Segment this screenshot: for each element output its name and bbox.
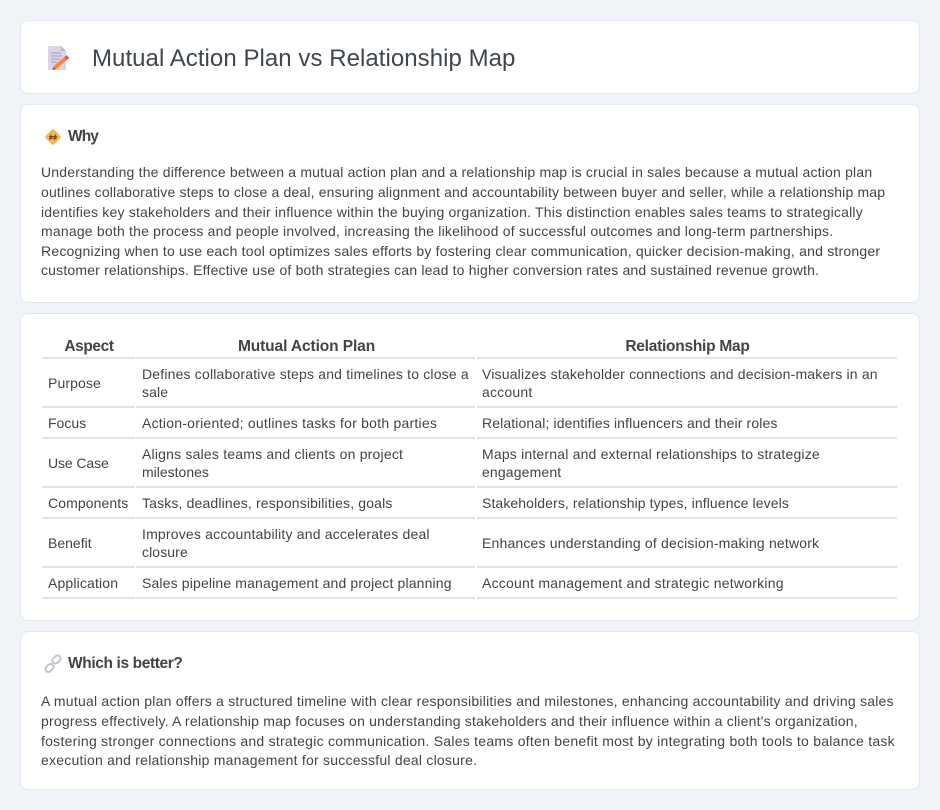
row: purpose: sale bbox=[142, 384, 168, 400]
row: components: Components bbox=[48, 495, 128, 511]
text block: which is better: progress effectively. A relationship map focuses on understanding stakeholders and their influence within a client's organization, bbox=[41, 713, 858, 729]
row: benefit: Benefit bbox=[48, 535, 92, 551]
row: use case bbox=[42, 446, 897, 488]
row: use case: Use Case bbox=[48, 455, 109, 471]
text block: why: Understanding the difference between a mutual action plan and a relationship map is crucial in sales because a mutual action plan bbox=[41, 164, 872, 180]
row: application: Account management and strategic networking bbox=[482, 575, 784, 591]
text block: why: identifies key stakeholders and their influence within the buying organization. This distinction enables sales teams to strategically bbox=[41, 204, 863, 220]
row: benefit bbox=[42, 526, 897, 568]
text block: which is better bbox=[41, 693, 895, 768]
text block: why bbox=[41, 164, 885, 278]
heading: which is better: Which is better? bbox=[68, 655, 182, 672]
table header row: Aspect bbox=[64, 338, 114, 355]
row: purpose: Visualizes stakeholder connections and decision-makers in an bbox=[482, 366, 878, 382]
panel: why bbox=[20, 104, 920, 303]
row: components: Tasks, deadlines, responsibilities, goals bbox=[142, 495, 393, 511]
header panel bbox=[20, 20, 920, 94]
row: benefit: Improves accountability and accelerates deal bbox=[142, 526, 430, 542]
table header row: Relationship Map bbox=[625, 338, 750, 355]
text block: which is better: execution and relationship management for successful deal closure. bbox=[41, 752, 477, 768]
text block: which is better: fostering stronger connections and strategic communication. Sales teams often benefit most by integrating both tools to balance task bbox=[41, 733, 895, 749]
row: focus: Action-oriented; outlines tasks for both parties bbox=[142, 415, 437, 431]
row: purpose: account bbox=[482, 384, 532, 400]
text block: which is better: A mutual action plan offers a structured timeline with clear responsibilities and milestones, enhancing accountability and driving sales bbox=[41, 693, 894, 709]
row: use case: milestones bbox=[142, 464, 209, 480]
row: focus bbox=[42, 415, 897, 439]
icon: chain link bbox=[44, 654, 62, 673]
table header row: Mutual Action Plan bbox=[238, 338, 375, 355]
text block: why: Recognizing when to use each tool optimizes sales efforts by fostering clear communication, quicker decision-making, and stronger bbox=[41, 243, 880, 259]
panel: comparison table bbox=[20, 313, 920, 621]
text block: why: manage both the process and people involved, increasing the likelihood of successful outcomes and long-term partnerships. bbox=[41, 223, 833, 239]
row: purpose: Purpose bbox=[48, 375, 101, 391]
icon: document with pencil bbox=[48, 46, 70, 70]
text block: why: customer relationships. Effective use of both strategies can lead to higher conversion rates and sustained revenue growth. bbox=[41, 262, 819, 278]
row: focus: Relational; identifies influencers and their roles bbox=[482, 415, 778, 431]
row: benefit: closure bbox=[142, 544, 188, 560]
row: use case: engagement bbox=[482, 464, 561, 480]
row: components: Stakeholders, relationship types, influence levels bbox=[482, 495, 789, 511]
row: purpose bbox=[42, 366, 897, 408]
row: focus: Focus bbox=[48, 415, 86, 431]
row: purpose: Defines collaborative steps and timelines to close a bbox=[142, 366, 469, 382]
icon: construction diamond bbox=[45, 129, 61, 145]
row: use case: Aligns sales teams and clients on project bbox=[142, 446, 403, 462]
title: Mutual Action Plan vs Relationship Map bbox=[92, 45, 515, 72]
row: application: Sales pipeline management and project planning bbox=[142, 575, 452, 591]
row: application: Application bbox=[48, 575, 118, 591]
row: use case: Maps internal and external relationships to strategize bbox=[482, 446, 820, 462]
heading: why: Why bbox=[68, 128, 98, 145]
panel: which is better bbox=[20, 631, 920, 790]
row: components bbox=[42, 495, 897, 519]
row: benefit: Enhances understanding of decision-making network bbox=[482, 535, 819, 551]
row: application bbox=[42, 575, 897, 599]
table header row bbox=[42, 338, 897, 359]
text block: why: outlines collaborative steps to close a deal, ensuring alignment and accountability between buyer and seller, while a relationship map bbox=[41, 184, 885, 200]
